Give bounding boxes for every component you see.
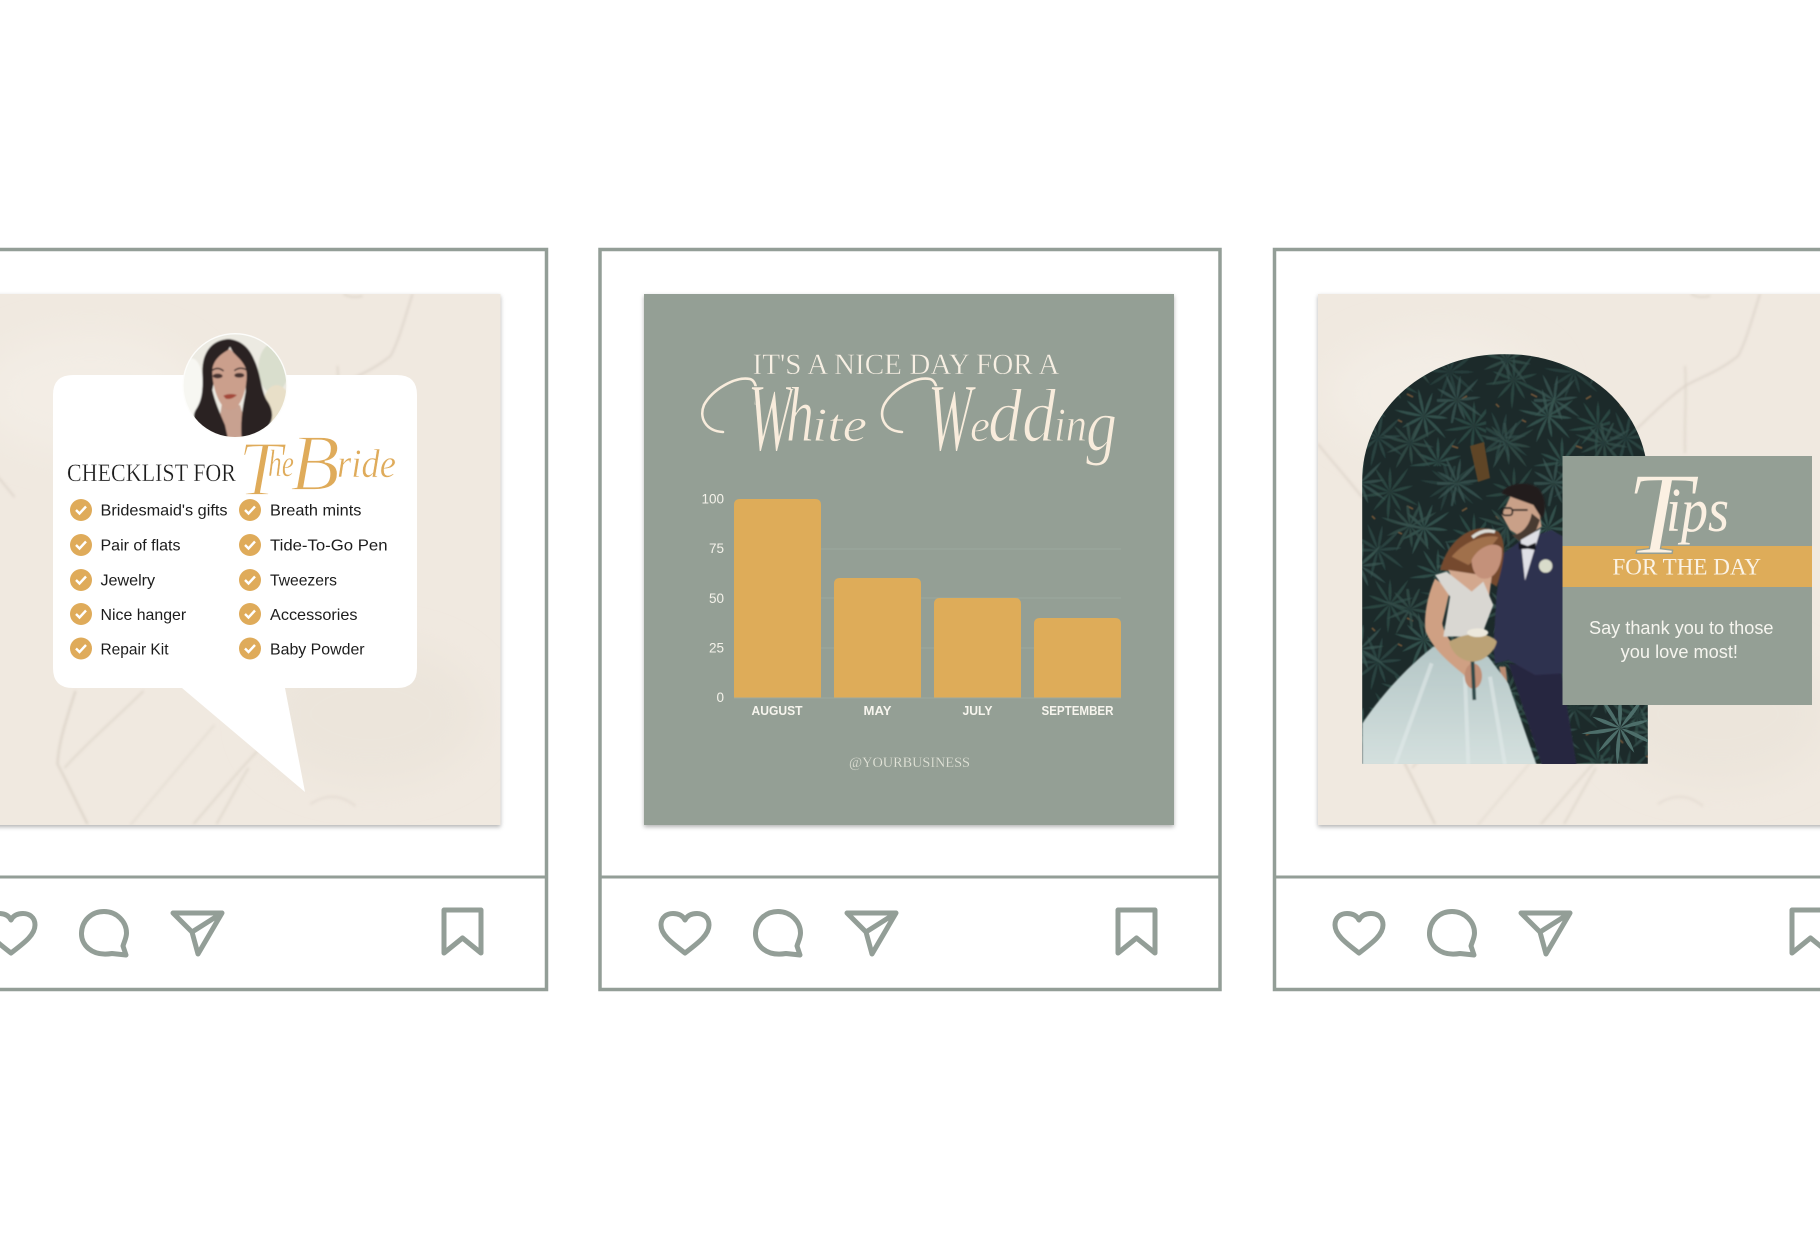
bar chart <box>701 492 1121 718</box>
script heading: tips: ips <box>1666 477 1729 545</box>
y axis labels: 0 <box>716 690 724 705</box>
icon: comment bubble <box>1429 912 1474 955</box>
x axis labels: SEPTEMBER <box>1042 703 1114 718</box>
card divider <box>1275 876 1820 878</box>
card frame <box>0 250 546 990</box>
speech bubble <box>53 375 417 792</box>
item: jewelry: Jewelry <box>100 572 155 590</box>
skirt folds <box>1395 663 1505 765</box>
handle: @YOURBUSINESS <box>849 755 970 771</box>
marble panel <box>0 294 500 825</box>
item: baby powder <box>239 638 365 660</box>
bouquet stem <box>1472 657 1474 700</box>
item: tweezers: Tweezers <box>270 572 337 590</box>
item: pair of flats: Pair of flats <box>100 538 180 554</box>
icon: comment bubble <box>755 912 800 955</box>
icon: paper plane <box>173 913 222 954</box>
card divider <box>0 876 546 878</box>
title line: IT'S A NICE DAY FOR A <box>752 348 1060 381</box>
large leaf cluster <box>1582 705 1648 764</box>
script heading: the bride: T <box>238 425 287 512</box>
title text: W <box>928 364 976 471</box>
title text: W <box>748 364 796 471</box>
icon: heart <box>1335 914 1383 953</box>
y axis labels: 25 <box>709 640 724 656</box>
sage panel <box>644 294 1174 825</box>
band label: FOR THE DAY <box>1612 554 1761 580</box>
x axis labels: AUGUST <box>752 703 803 718</box>
x axis labels <box>752 703 1114 718</box>
bride hand <box>1465 663 1482 689</box>
item: bridesmaid's gifts: Bridesmaid's gifts <box>100 502 228 520</box>
flourishes <box>702 379 937 432</box>
icon: bookmark <box>1118 910 1155 953</box>
bar: july <box>934 598 1021 698</box>
gold band <box>1562 546 1812 587</box>
script heading: tips: T <box>1626 448 1699 579</box>
bar: may <box>834 578 921 698</box>
card frame <box>1274 250 1820 990</box>
bar: august <box>734 499 821 698</box>
post card: tips for the day <box>1274 250 1820 990</box>
item: repair kit <box>70 638 169 660</box>
item: baby powder: Baby Powder <box>270 642 365 658</box>
tips box <box>1562 448 1812 705</box>
icon: bookmark <box>444 910 481 953</box>
item: breath mints: Breath mints <box>270 502 361 520</box>
card frame <box>600 250 1220 990</box>
item: accessories <box>239 603 358 625</box>
tip message: you love most! <box>1621 642 1738 662</box>
bride arm <box>1424 578 1472 676</box>
y axis labels: 50 <box>709 591 724 606</box>
item: jewelry <box>70 569 155 591</box>
bride bodice <box>1435 572 1493 637</box>
icon: paper plane <box>847 913 896 954</box>
couple figures <box>1362 484 1577 765</box>
item: bridesmaid's gifts <box>70 499 228 521</box>
y axis labels: 100 <box>701 492 724 506</box>
x axis labels: JULY <box>962 703 993 718</box>
item: tide-to-go pen <box>239 534 388 556</box>
title text: h <box>786 371 814 458</box>
script heading: the bride: ride <box>337 441 396 486</box>
icon: bookmark <box>1792 910 1820 953</box>
arch photo: couple <box>1362 354 1658 766</box>
action icons <box>661 910 1155 955</box>
tip message: Say thank you to those <box>1589 618 1774 638</box>
item: repair kit: Repair Kit <box>100 642 169 658</box>
item: nice hanger <box>70 603 187 625</box>
bow tie <box>1518 543 1536 550</box>
icon: heart <box>661 914 709 953</box>
tip message <box>1589 618 1774 662</box>
icon: paper plane <box>1521 913 1570 954</box>
dried leaves <box>1470 442 1490 482</box>
title text: ite <box>812 399 867 452</box>
title text: e <box>970 400 990 451</box>
y axis labels: 75 <box>709 541 724 556</box>
bride hair <box>1440 528 1504 587</box>
item: nice hanger: Nice hanger <box>100 607 187 624</box>
groom legs <box>1508 663 1577 765</box>
action icons <box>1335 910 1820 955</box>
script heading: the bride: he <box>268 443 294 485</box>
item: tweezers <box>239 569 337 591</box>
title text: dd <box>988 374 1057 458</box>
item: pair of flats <box>70 534 180 556</box>
script heading: the bride: B <box>290 420 340 508</box>
post card: white wedding bar chart <box>600 250 1220 990</box>
bride dress skirt <box>1362 647 1537 765</box>
tiara <box>1472 531 1495 537</box>
checklist heading <box>67 420 396 512</box>
y axis labels <box>701 492 724 705</box>
heading: checklist for: CHECKLIST FOR <box>67 460 236 487</box>
x axis labels: MAY <box>864 703 892 718</box>
bouquet <box>1449 634 1497 662</box>
marble panel <box>1318 294 1820 825</box>
title text: in <box>1054 399 1087 452</box>
item: breath mints <box>239 499 361 521</box>
groom jacket <box>1493 530 1563 675</box>
groom hand <box>1499 667 1508 685</box>
groom shirt <box>1521 528 1541 581</box>
groom head <box>1502 484 1545 542</box>
checklist right column <box>239 499 388 660</box>
bride chest <box>1448 569 1493 596</box>
checklist left column <box>70 499 228 660</box>
bar: september <box>1034 618 1121 698</box>
foliage backdrop <box>1362 354 1648 764</box>
sage box <box>1562 456 1812 705</box>
item: accessories: Accessories <box>270 607 358 624</box>
title text: g <box>1086 385 1117 467</box>
boutonniere <box>1539 559 1552 573</box>
post card: bride checklist <box>0 250 546 990</box>
bride face <box>1472 545 1502 579</box>
icon: comment bubble <box>81 912 126 955</box>
chart gridlines <box>734 549 1121 698</box>
item: tide-to-go pen: Tide-To-Go Pen <box>270 538 388 554</box>
icon: heart <box>0 914 35 953</box>
script title <box>702 364 1117 471</box>
avatar portrait <box>184 333 286 437</box>
card divider <box>601 876 1220 878</box>
action icons <box>0 910 481 955</box>
